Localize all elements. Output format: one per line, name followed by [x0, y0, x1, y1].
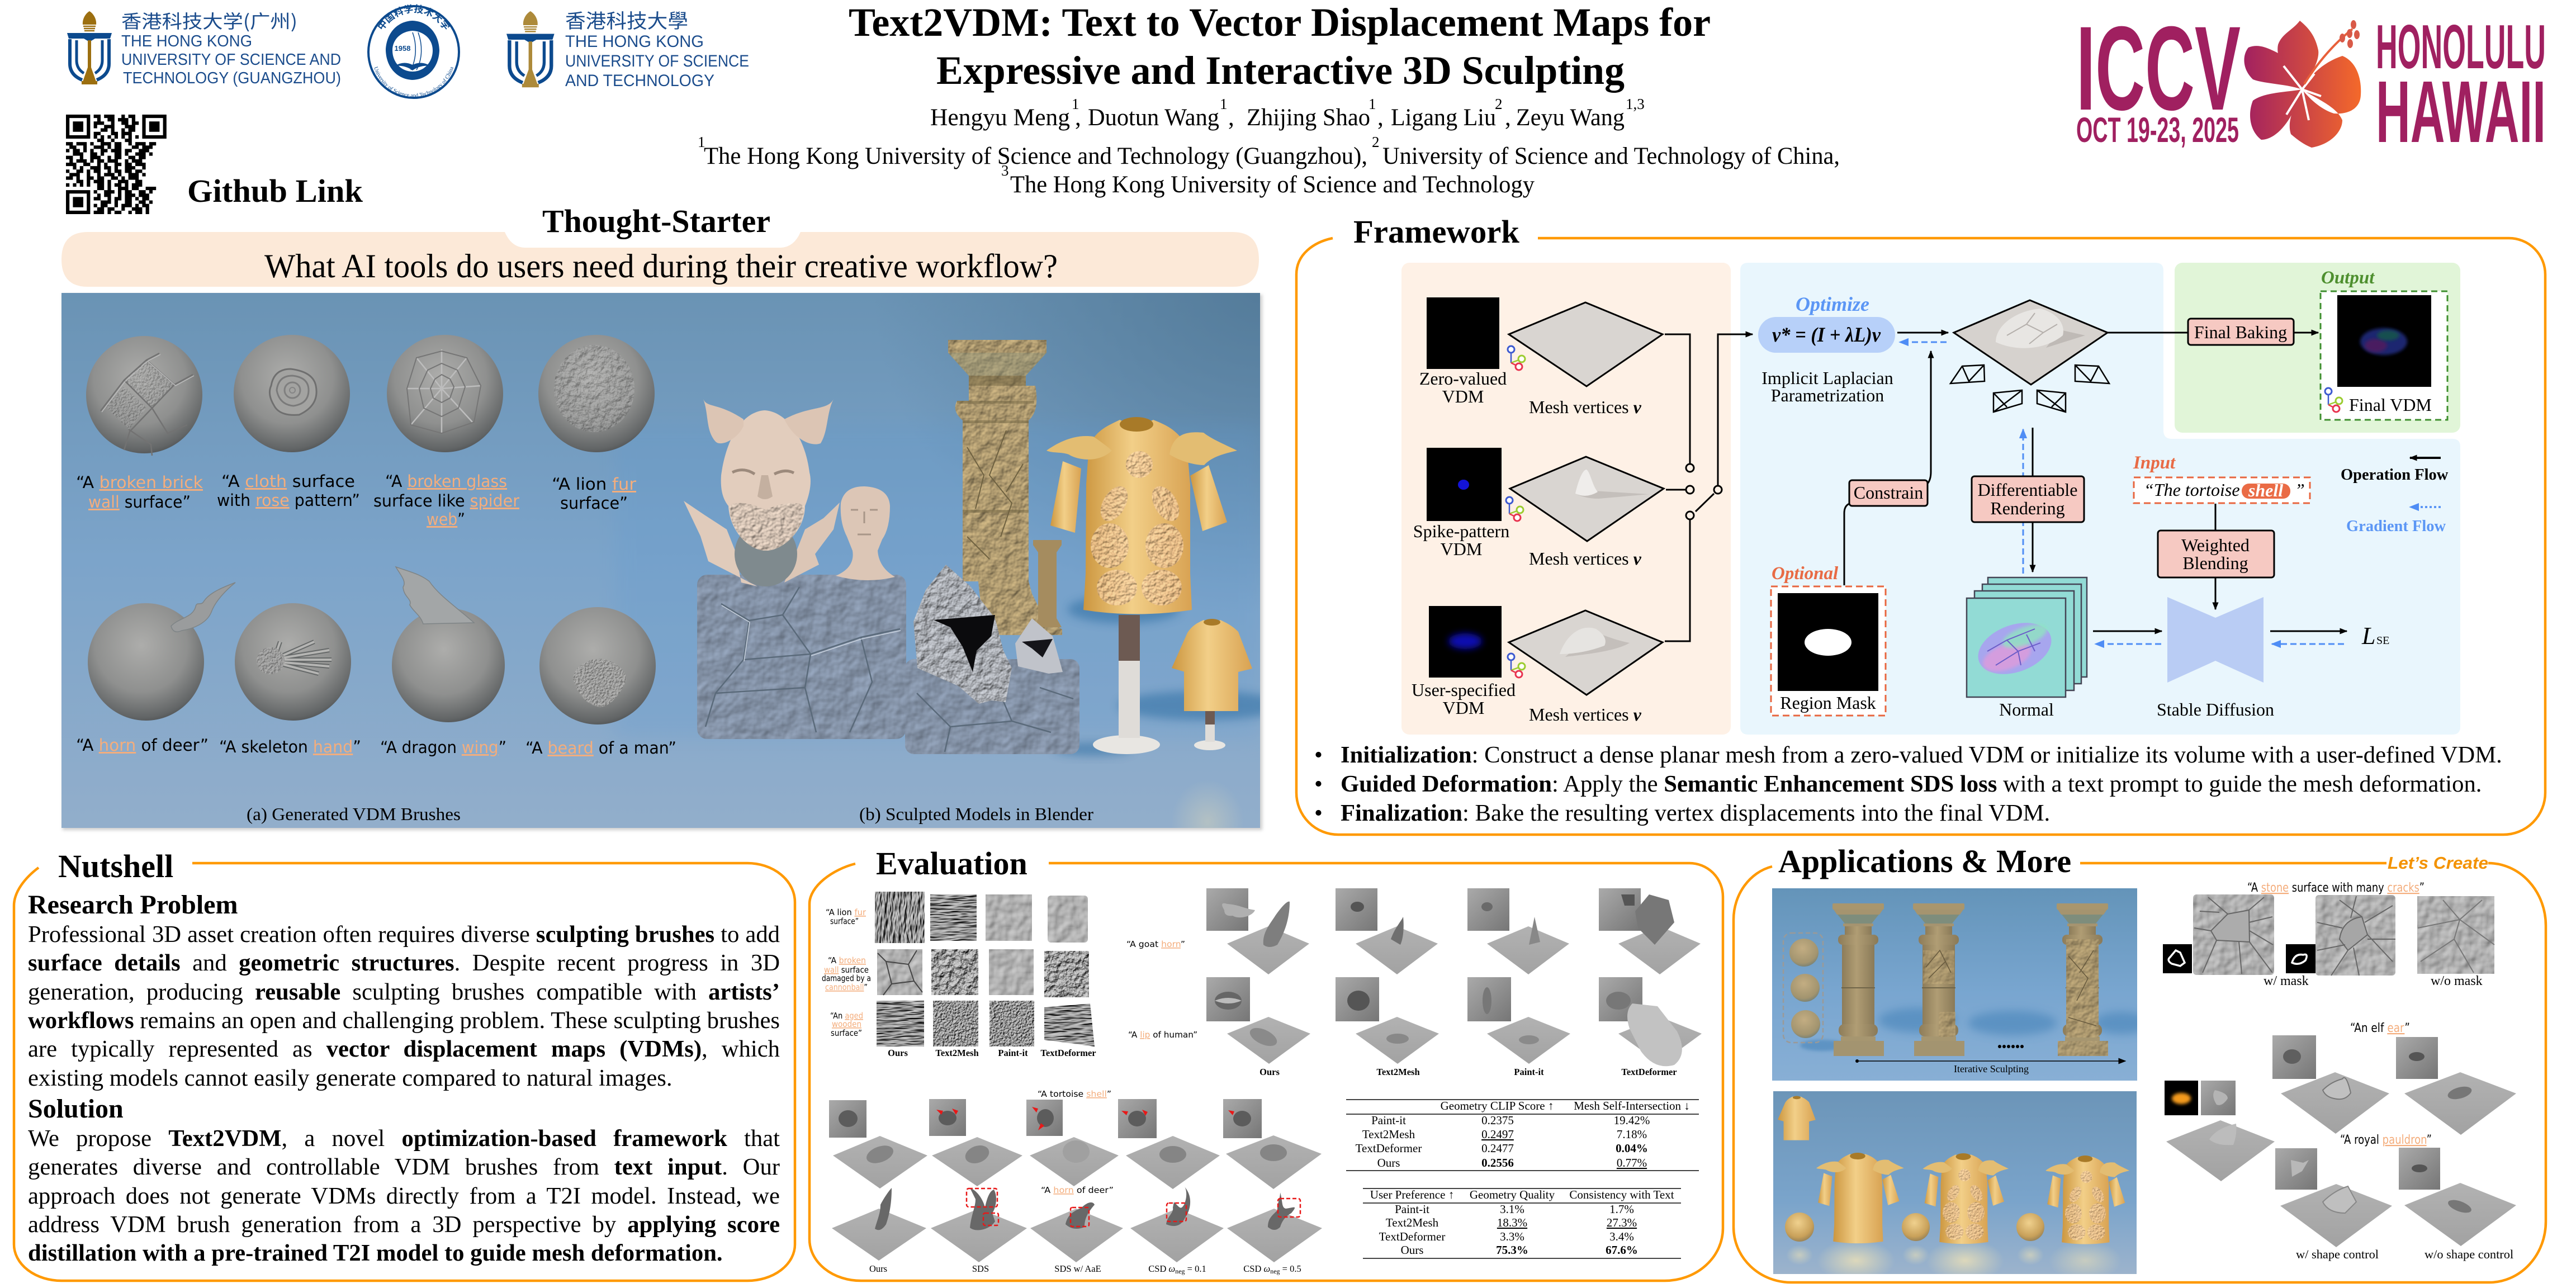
logo: USTC round seal: 1958: [395, 44, 410, 53]
table: user preference: [1363, 1188, 1681, 1258]
figure: shape control: w/o shape control: [2425, 1247, 2513, 1261]
brush captions: wall surface”: [88, 493, 191, 512]
armor shirt large: [1046, 417, 1237, 614]
head model plain: [836, 486, 895, 580]
figure: shape control: w/ shape control: [2296, 1247, 2379, 1261]
figure: mask control: “A stone surface with many cracks”: [2247, 881, 2425, 895]
input row: zero-valued VDM: Mesh vertices v: [1529, 397, 1642, 417]
weighted blending: Blending: [2182, 553, 2248, 573]
input row: user-specified VDM: [1412, 606, 1663, 724]
sphere: lion fur: [538, 335, 655, 452]
figure: texture comparison: surface”: [831, 1028, 862, 1038]
authors: 2: [1495, 96, 1503, 112]
figure: geometry comparison: [1126, 888, 1702, 1077]
table: geometry metrics: 0.2497: [1481, 1128, 1514, 1141]
logo: ICCV Honolulu Hawaii: ICCV: [2076, 2, 2241, 135]
brush captions: surface”: [560, 494, 628, 513]
table: geometry metrics: Geometry CLIP Score ↑: [1441, 1099, 1554, 1112]
floor shadows: [1054, 595, 1286, 756]
text block: research problem: are typically represented as vector displacement maps (VDMs), which: [28, 1036, 780, 1062]
figure: texture comparison: [822, 892, 1096, 1058]
figure: texture comparison: “A lion fur: [826, 907, 866, 917]
authors: ,: [1377, 105, 1384, 131]
affiliations: The Hong Kong University of Science and Technology (Guangzhou),: [704, 143, 1367, 169]
brush captions: “A horn of deer”: [76, 736, 209, 755]
sphere: broken brick wall: [86, 336, 202, 456]
optional region mask: Optional: [1772, 564, 1839, 584]
brush captions: surface like spider: [373, 491, 519, 510]
title: Text2VDM: Text to Vector Displacement Maps for: [849, 0, 1711, 45]
figure: loss comparison: neg: [1270, 1267, 1280, 1275]
table: geometry metrics: Ours: [1377, 1156, 1400, 1169]
input prompt: “The tortoise: [2144, 480, 2240, 500]
brush captions: “A broken brick: [76, 473, 203, 492]
table: geometry metrics: Paint-it: [1371, 1114, 1406, 1127]
figure: loss comparison: “A horn of deer”: [1041, 1185, 1114, 1195]
panel border: [1296, 238, 2545, 835]
optimized mesh with cameras: [1950, 300, 2109, 412]
helmet model small: [1015, 618, 1063, 674]
brush captions: web”: [427, 510, 465, 529]
region: input VDMs: [1401, 263, 1731, 735]
logo: HKUST: [506, 6, 749, 90]
text block: research problem: generation, producing reusable sculpting brushes compatible with artists’: [28, 979, 780, 1005]
output final VDM: Final VDM: [2349, 395, 2432, 415]
authors: 1: [1072, 96, 1079, 112]
affiliations: University of Science and Technology of China,: [1382, 143, 1840, 169]
figure: mask control: w/o mask: [2431, 974, 2483, 988]
sphere: skeleton hand: [235, 603, 351, 721]
affiliations: 1: [698, 134, 705, 150]
figure: texture comparison: wooden: [832, 1019, 861, 1029]
differentiable rendering: Differentiable: [1978, 480, 2077, 500]
image: armor sculpting: [1773, 1091, 2137, 1282]
table: user preference: User Preference ↑: [1370, 1188, 1454, 1201]
table: user preference: 3.1%: [1500, 1202, 1524, 1216]
text block: solution: generates diverse and controllable VDM brushes from text input. Our: [28, 1154, 780, 1180]
bullet list: Finalization: Bake the resulting vertex displacements into the final VDM.: [1341, 800, 2050, 826]
authors: Hengyu Meng: [930, 105, 1070, 131]
brush spheres: [1783, 933, 1823, 1043]
weighted blending: [2158, 504, 2274, 609]
table: geometry metrics: 0.2556: [1481, 1156, 1514, 1169]
figure: loss comparison: “A tortoise shell”: [1038, 1089, 1111, 1099]
stable diffusion: Stable Diffusion: [2157, 699, 2274, 719]
authors: Duotun Wang: [1088, 105, 1219, 131]
table: user preference: 67.6%: [1606, 1243, 1638, 1257]
input row: zero-valued VDM: Zero-valued: [1419, 368, 1507, 389]
table: user preference: TextDeformer: [1379, 1230, 1445, 1243]
figure: geometry comparison: “A goat horn”: [1126, 939, 1185, 949]
head model sculpted: [684, 399, 840, 586]
logo: HKUST: THE HONG KONG: [565, 32, 704, 51]
table: user preference: 1.7%: [1609, 1202, 1634, 1216]
table: geometry metrics: 0.2375: [1481, 1114, 1514, 1127]
table: geometry metrics: 7.18%: [1617, 1128, 1647, 1141]
panel: framework: [1296, 214, 2545, 835]
input prompt: Input: [2133, 453, 2176, 473]
brush captions: “A broken glass: [385, 472, 507, 491]
stone block small: [905, 659, 1079, 754]
figure: texture comparison: Ours: [888, 1048, 908, 1058]
input row: spike-pattern VDM: Mesh vertices v: [1529, 548, 1642, 569]
stone block large: [697, 575, 906, 739]
logo: USTC round seal: 中国科学技术大学: [378, 4, 450, 30]
panel: main render figure: [61, 293, 1286, 864]
title: Expressive and Interactive 3D Sculpting: [936, 48, 1625, 93]
table: geometry metrics: 0.2477: [1481, 1142, 1514, 1155]
table: geometry metrics: 19.42%: [1614, 1114, 1650, 1127]
text block: research problem: Professional 3D asset creation often requires diverse sculpting brushes to add: [28, 921, 780, 948]
text block: solution: approach does not generate VDMs directly from a T2I model. Instead, we: [28, 1183, 780, 1209]
logo: HKUST (Guangzhou): THE HONG KONG: [121, 32, 252, 50]
input row: zero-valued VDM: VDM: [1442, 386, 1484, 406]
figure: loss comparison: [829, 1089, 1322, 1275]
text block: solution: [28, 1124, 780, 1268]
normal map stack: Normal: [1999, 699, 2054, 719]
authors: ,: [1228, 105, 1234, 131]
logo: ICCV Honolulu Hawaii: [2076, 2, 2546, 161]
text block: research problem: existing models cannot easily generate compared to natural images.: [28, 1065, 673, 1091]
figure: texture comparison: Text2Mesh: [935, 1048, 979, 1058]
logo: HKUST: 香港科技大學: [565, 6, 688, 34]
formula: implicit laplacian: Implicit Laplacian: [1761, 368, 1893, 388]
table: user preference: 3.4%: [1609, 1230, 1634, 1243]
input prompt: shell: [2248, 480, 2283, 500]
normal map stack: [1967, 577, 2087, 719]
image: iterative sculpting columns: [1772, 888, 2149, 1081]
logo: HKUST (Guangzhou): TECHNOLOGY (GUANGZHOU): [123, 69, 341, 87]
authors: 1,3: [1626, 96, 1645, 112]
sphere: man beard: [539, 607, 656, 724]
figure: loss comparison: = 0.5: [1280, 1263, 1301, 1274]
input row: zero-valued VDM: [1419, 297, 1663, 417]
figure caption a: (a) Generated VDM Brushes: [247, 804, 461, 824]
panel: nutshell border and heading: [14, 848, 795, 1281]
brush captions: “A dragon wing”: [380, 738, 506, 757]
brush captions: with rose pattern”: [217, 491, 360, 510]
figure: texture comparison: cannonball”: [825, 982, 868, 992]
differentiable rendering: [1972, 428, 2084, 574]
figure: shape control: “A royal pauldron”: [2340, 1133, 2432, 1147]
figure: loss comparison: SDS: [972, 1263, 989, 1274]
figure: loss comparison: CSD ω: [1148, 1263, 1175, 1274]
table: geometry metrics: [1346, 1099, 1699, 1171]
brush captions: “A cloth surface: [221, 472, 355, 491]
figure: texture comparison: “A broken: [828, 955, 866, 965]
github link label: Github Link: [187, 173, 363, 209]
iterative sculpting arrow: [1855, 1059, 2125, 1074]
heading: Framework: [1353, 214, 1520, 250]
authors: Zhijing Shao: [1247, 105, 1370, 131]
formula: implicit laplacian: Parametrization: [1771, 385, 1884, 405]
table: user preference: Consistency with Text: [1569, 1188, 1674, 1201]
table: user preference: 27.3%: [1607, 1216, 1637, 1229]
figure: texture comparison: TextDeformer: [1040, 1048, 1096, 1058]
iterative sculpting arrow: Iterative Sculpting: [1954, 1063, 2029, 1074]
panel border: [809, 863, 1723, 1281]
legend: flows: Operation Flow: [2341, 466, 2449, 484]
input prompt: ”: [2295, 480, 2305, 500]
SE loss: L: [2361, 622, 2375, 650]
legend: flows: Gradient Flow: [2346, 518, 2446, 535]
progress dots: [1998, 1045, 2024, 1048]
weighted blending: Weighted: [2181, 535, 2250, 555]
figure: loss comparison: SDS w/ AaE: [1054, 1263, 1101, 1274]
authors: [930, 96, 1645, 131]
figure caption b: (b) Sculpted Models in Blender: [859, 804, 1093, 824]
tee small with stand: [1172, 619, 1252, 750]
logo: HKUST (Guangzhou): [67, 7, 341, 87]
output final VDM: [2321, 268, 2447, 420]
legend: flows: [2341, 458, 2449, 535]
panel: nutshell border and heading: Nutshell: [58, 848, 173, 884]
text block: solution: distillation with a pre-trained T2I model to guide mesh deformation.: [28, 1240, 723, 1266]
table: user preference: Geometry Quality: [1470, 1188, 1555, 1201]
table: geometry metrics: Mesh Self-Intersection ↓: [1574, 1099, 1690, 1112]
logo: USTC round seal: University of Science and Technology of China: [375, 66, 453, 97]
text block: research problem: [28, 920, 780, 1092]
figure: geometry comparison: TextDeformer: [1621, 1067, 1677, 1077]
title: [849, 0, 1711, 93]
figure: geometry comparison: Ours: [1259, 1067, 1280, 1077]
logo: HKUST: AND TECHNOLOGY: [565, 72, 714, 90]
panel border: [1734, 863, 2546, 1282]
table: user preference: Ours: [1401, 1243, 1423, 1257]
output final VDM: Output: [2321, 268, 2375, 288]
panel: applications and more: [1734, 843, 2546, 1282]
figure: texture comparison: surface”: [830, 916, 859, 926]
constrain box: Constrain: [1854, 482, 1923, 503]
figure: loss comparison: Ours: [869, 1263, 887, 1274]
SE loss: [2361, 622, 2389, 650]
differentiable rendering: Rendering: [1990, 498, 2065, 518]
heading: Thought-Starter: [542, 203, 770, 239]
formula: implicit laplacian: [1758, 293, 1895, 405]
text block: solution: We propose Text2VDM, a novel optimization-based framework that: [28, 1125, 780, 1152]
heading: Evaluation: [876, 845, 1027, 882]
section: research problem heading: Research Problem: [28, 890, 238, 920]
bullet list: [1314, 742, 2502, 826]
authors: ,: [1075, 105, 1081, 131]
bullet list: Guided Deformation: Apply the Semantic Enhancement SDS loss with a text prompt to guide the mesh deformation.: [1341, 771, 2482, 797]
figure: geometry comparison: Paint-it: [1514, 1067, 1544, 1077]
optional region mask: Region Mask: [1780, 693, 1876, 713]
switch connector: [1665, 334, 1753, 641]
question pill: [61, 232, 1259, 287]
figure: loss comparison: neg: [1175, 1267, 1185, 1275]
authors: 1: [1368, 96, 1376, 112]
figure: loss comparison: CSD ω: [1243, 1263, 1270, 1274]
affiliations: The Hong Kong University of Science and Technology: [1010, 172, 1535, 198]
panel: evaluation: [809, 845, 1723, 1281]
stable diffusion: [2157, 597, 2274, 719]
tagline: Let’s Create: [2388, 853, 2488, 873]
sphere: cloth rose: [234, 335, 350, 452]
table: geometry metrics: 0.77%: [1617, 1156, 1647, 1169]
optional region mask: [1771, 564, 1886, 716]
bullet list: •: [1314, 800, 1323, 826]
sphere: dragon wing: [392, 567, 505, 722]
table: user preference: Text2Mesh: [1386, 1216, 1439, 1229]
figure: mask control: w/ mask: [2264, 974, 2309, 988]
QR code: [66, 115, 167, 214]
region: optimization: [1740, 263, 2460, 735]
figure: texture comparison: damaged by a: [822, 973, 871, 983]
brush captions: “A beard of a man”: [525, 738, 676, 757]
constrain box: [1844, 351, 1931, 585]
helmet model large: [913, 565, 1012, 704]
column model large: [948, 340, 1062, 635]
figure: texture comparison: “An aged: [830, 1011, 863, 1021]
logo: USTC round seal: [368, 1, 459, 99]
logo: HKUST: UNIVERSITY OF SCIENCE: [565, 52, 749, 70]
bullet list: Initialization: Construct a dense planar mesh from a zero-valued VDM or initialize its volume with a user-defined VDM.: [1341, 742, 2502, 768]
table: user preference: 75.3%: [1496, 1243, 1528, 1257]
figure: shape control: [2165, 1021, 2516, 1261]
table: geometry metrics: 0.04%: [1616, 1142, 1648, 1155]
figure: geometry comparison: Text2Mesh: [1376, 1067, 1420, 1077]
input row: spike-pattern VDM: [1413, 448, 1664, 569]
figure: loss comparison: = 0.1: [1185, 1263, 1206, 1274]
table: geometry metrics: TextDeformer: [1356, 1142, 1422, 1155]
table: user preference: 3.3%: [1500, 1230, 1524, 1243]
flow arrows: [2093, 631, 2347, 644]
brush captions: “A skeleton hand”: [219, 737, 361, 756]
brush captions: [76, 472, 676, 757]
affiliations: 3: [1001, 162, 1008, 179]
authors: 1: [1220, 96, 1228, 112]
table: geometry metrics: Text2Mesh: [1362, 1128, 1415, 1141]
section: solution heading: Solution: [28, 1094, 124, 1124]
figure: geometry comparison: “A lip of human”: [1128, 1030, 1197, 1040]
logo: HKUST (Guangzhou): 香港科技大学(广州): [121, 7, 297, 34]
logo: ICCV Honolulu Hawaii: OCT 19-23, 2025: [2076, 111, 2239, 150]
affiliations: 2: [1372, 134, 1380, 150]
heading: Applications & More: [1778, 843, 2071, 879]
figure: mask control: [2163, 881, 2494, 988]
text block: research problem: workflows remains an open and challenging problem. These sculpting brushes: [28, 1007, 780, 1034]
input row: user-specified VDM: User-specified: [1412, 680, 1516, 700]
figure: texture comparison: Paint-it: [998, 1048, 1028, 1058]
formula: implicit laplacian: v* = (I + λL)v: [1772, 324, 1881, 347]
input prompt: [2133, 453, 2310, 503]
final baking to output: Final Baking: [2194, 322, 2287, 342]
panel: thought-starter: [61, 203, 1259, 287]
text block: research problem: surface details and geometric structures. Despite recent progress in 3D: [28, 950, 780, 976]
region: output: [2175, 263, 2460, 433]
input row: spike-pattern VDM: Spike-pattern: [1413, 521, 1509, 541]
mannequin stand large: [1093, 615, 1160, 754]
column model small: [1033, 540, 1062, 627]
brush captions: “A lion fur: [552, 475, 636, 494]
authors: Zeyu Wang: [1516, 105, 1625, 131]
final baking to output: [2108, 319, 2318, 345]
optimize to mesh arrows: [1897, 333, 1948, 342]
sphere: spider web: [387, 335, 503, 452]
SE loss: SE: [2376, 634, 2389, 647]
input row: user-specified VDM: VDM: [1443, 698, 1484, 718]
affiliations: [698, 134, 1840, 198]
logo: HKUST (Guangzhou): UNIVERSITY OF SCIENCE AND: [121, 51, 341, 69]
input row: user-specified VDM: Mesh vertices v: [1529, 704, 1642, 724]
input row: spike-pattern VDM: VDM: [1441, 539, 1482, 559]
text block: solution: address VDM brush generation from a 3D perspective by applying score: [28, 1211, 780, 1238]
table: user preference: 18.3%: [1497, 1216, 1527, 1229]
bullet list: •: [1314, 771, 1323, 797]
authors: ,: [1505, 105, 1511, 131]
sphere: deer horn: [88, 583, 235, 721]
authors: Ligang Liu: [1391, 105, 1496, 131]
bullet list: •: [1314, 742, 1323, 768]
table: user preference: Paint-it: [1395, 1202, 1429, 1216]
formula: implicit laplacian: Optimize: [1796, 293, 1869, 315]
figure: texture comparison: wall surface: [824, 965, 869, 975]
question text: What AI tools do users need during their creative workflow?: [264, 248, 1058, 285]
figure: shape control: “An elf ear”: [2350, 1021, 2410, 1035]
